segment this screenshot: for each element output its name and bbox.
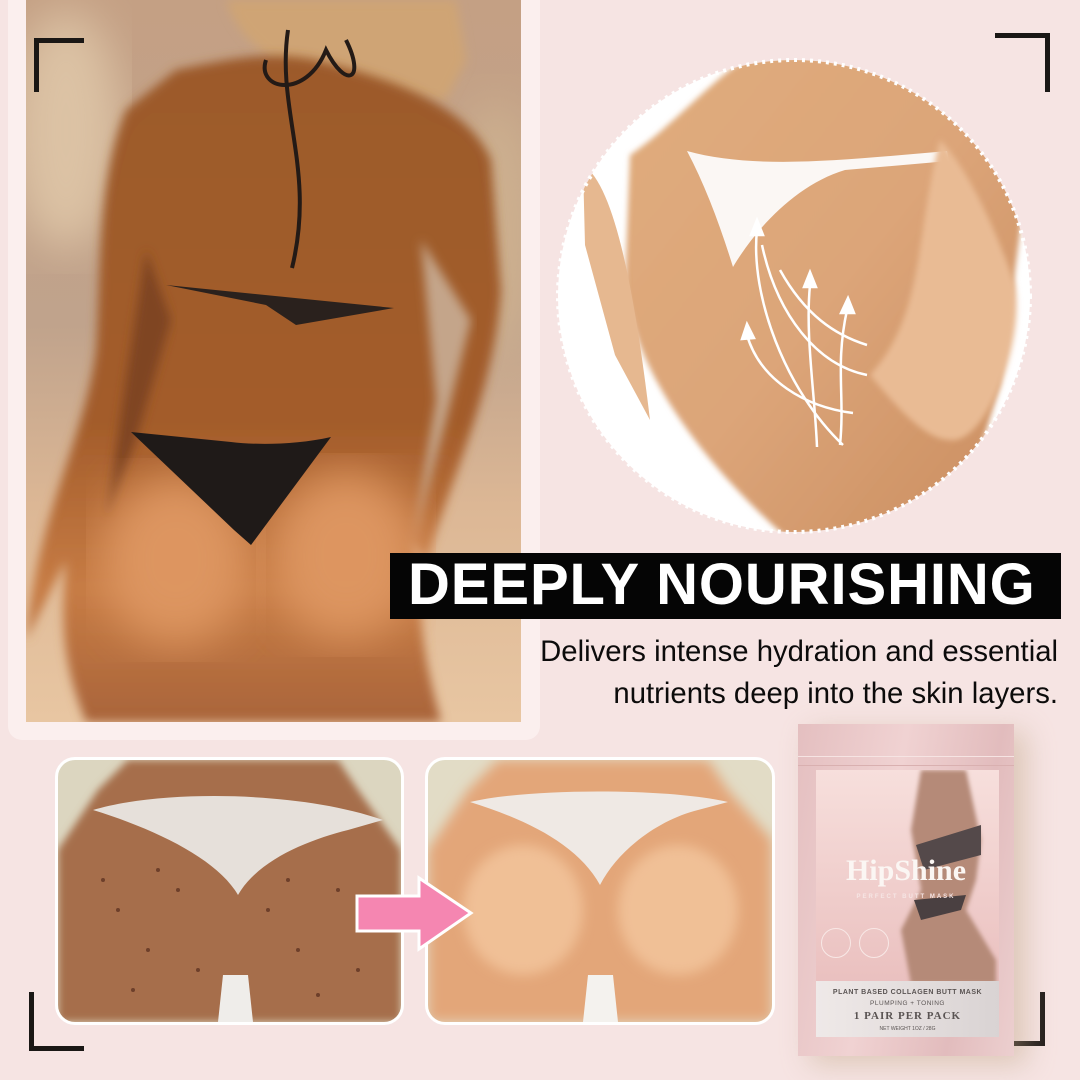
panel: before photo xyxy=(55,757,404,1025)
badge: cruelty free xyxy=(859,928,889,958)
panel: after photo xyxy=(425,757,775,1025)
photo: abstract beach scene with warm skin tones xyxy=(26,0,521,722)
text block: description xyxy=(540,635,1058,710)
photo: abstract darker skin tone xyxy=(58,760,401,1022)
decor: corner bracket bottom right xyxy=(990,992,1045,1046)
figure silhouette xyxy=(26,56,501,722)
pouch artwork xyxy=(816,770,999,984)
decor: corner bracket bottom left xyxy=(29,992,84,1051)
text block: description: nutrients deep into the skin layers. xyxy=(613,677,1058,710)
subtitle: PERFECT BUTT MASK xyxy=(856,894,956,900)
photo: abstract lighter skin tone xyxy=(428,760,772,1022)
label line 3: 1 PAIR PER PACK xyxy=(854,1010,961,1022)
dotted outline xyxy=(558,60,1030,532)
decor: corner bracket top left xyxy=(34,38,84,92)
label block xyxy=(816,981,999,1037)
decor: corner bracket top right xyxy=(995,33,1050,92)
label line 4: NET WEIGHT 1OZ / 28G xyxy=(880,1026,935,1032)
icon: white lift arrows xyxy=(742,220,867,447)
black swimwear shapes xyxy=(131,432,331,545)
panel: circular close-up with dotted outline xyxy=(556,58,1032,534)
zip seal strip xyxy=(798,756,1014,766)
label line 1: PLANT BASED COLLAGEN BUTT MASK xyxy=(833,989,982,996)
badge: paraben free xyxy=(821,928,851,958)
label line 2: PLUMPING + TONING xyxy=(870,1000,945,1007)
icon: pink before-to-after arrow xyxy=(356,875,474,952)
heading bar: deeply nourishing: DEEPLY NOURISHING xyxy=(408,552,1036,617)
brand name: HipShine xyxy=(846,854,966,887)
product: HipShine pouch xyxy=(798,724,1014,1056)
panel: large photo with pale frame xyxy=(8,0,540,740)
text block: description: Delivers intense hydration and essential xyxy=(540,635,1058,668)
figure: abstract silhouette xyxy=(899,770,998,981)
